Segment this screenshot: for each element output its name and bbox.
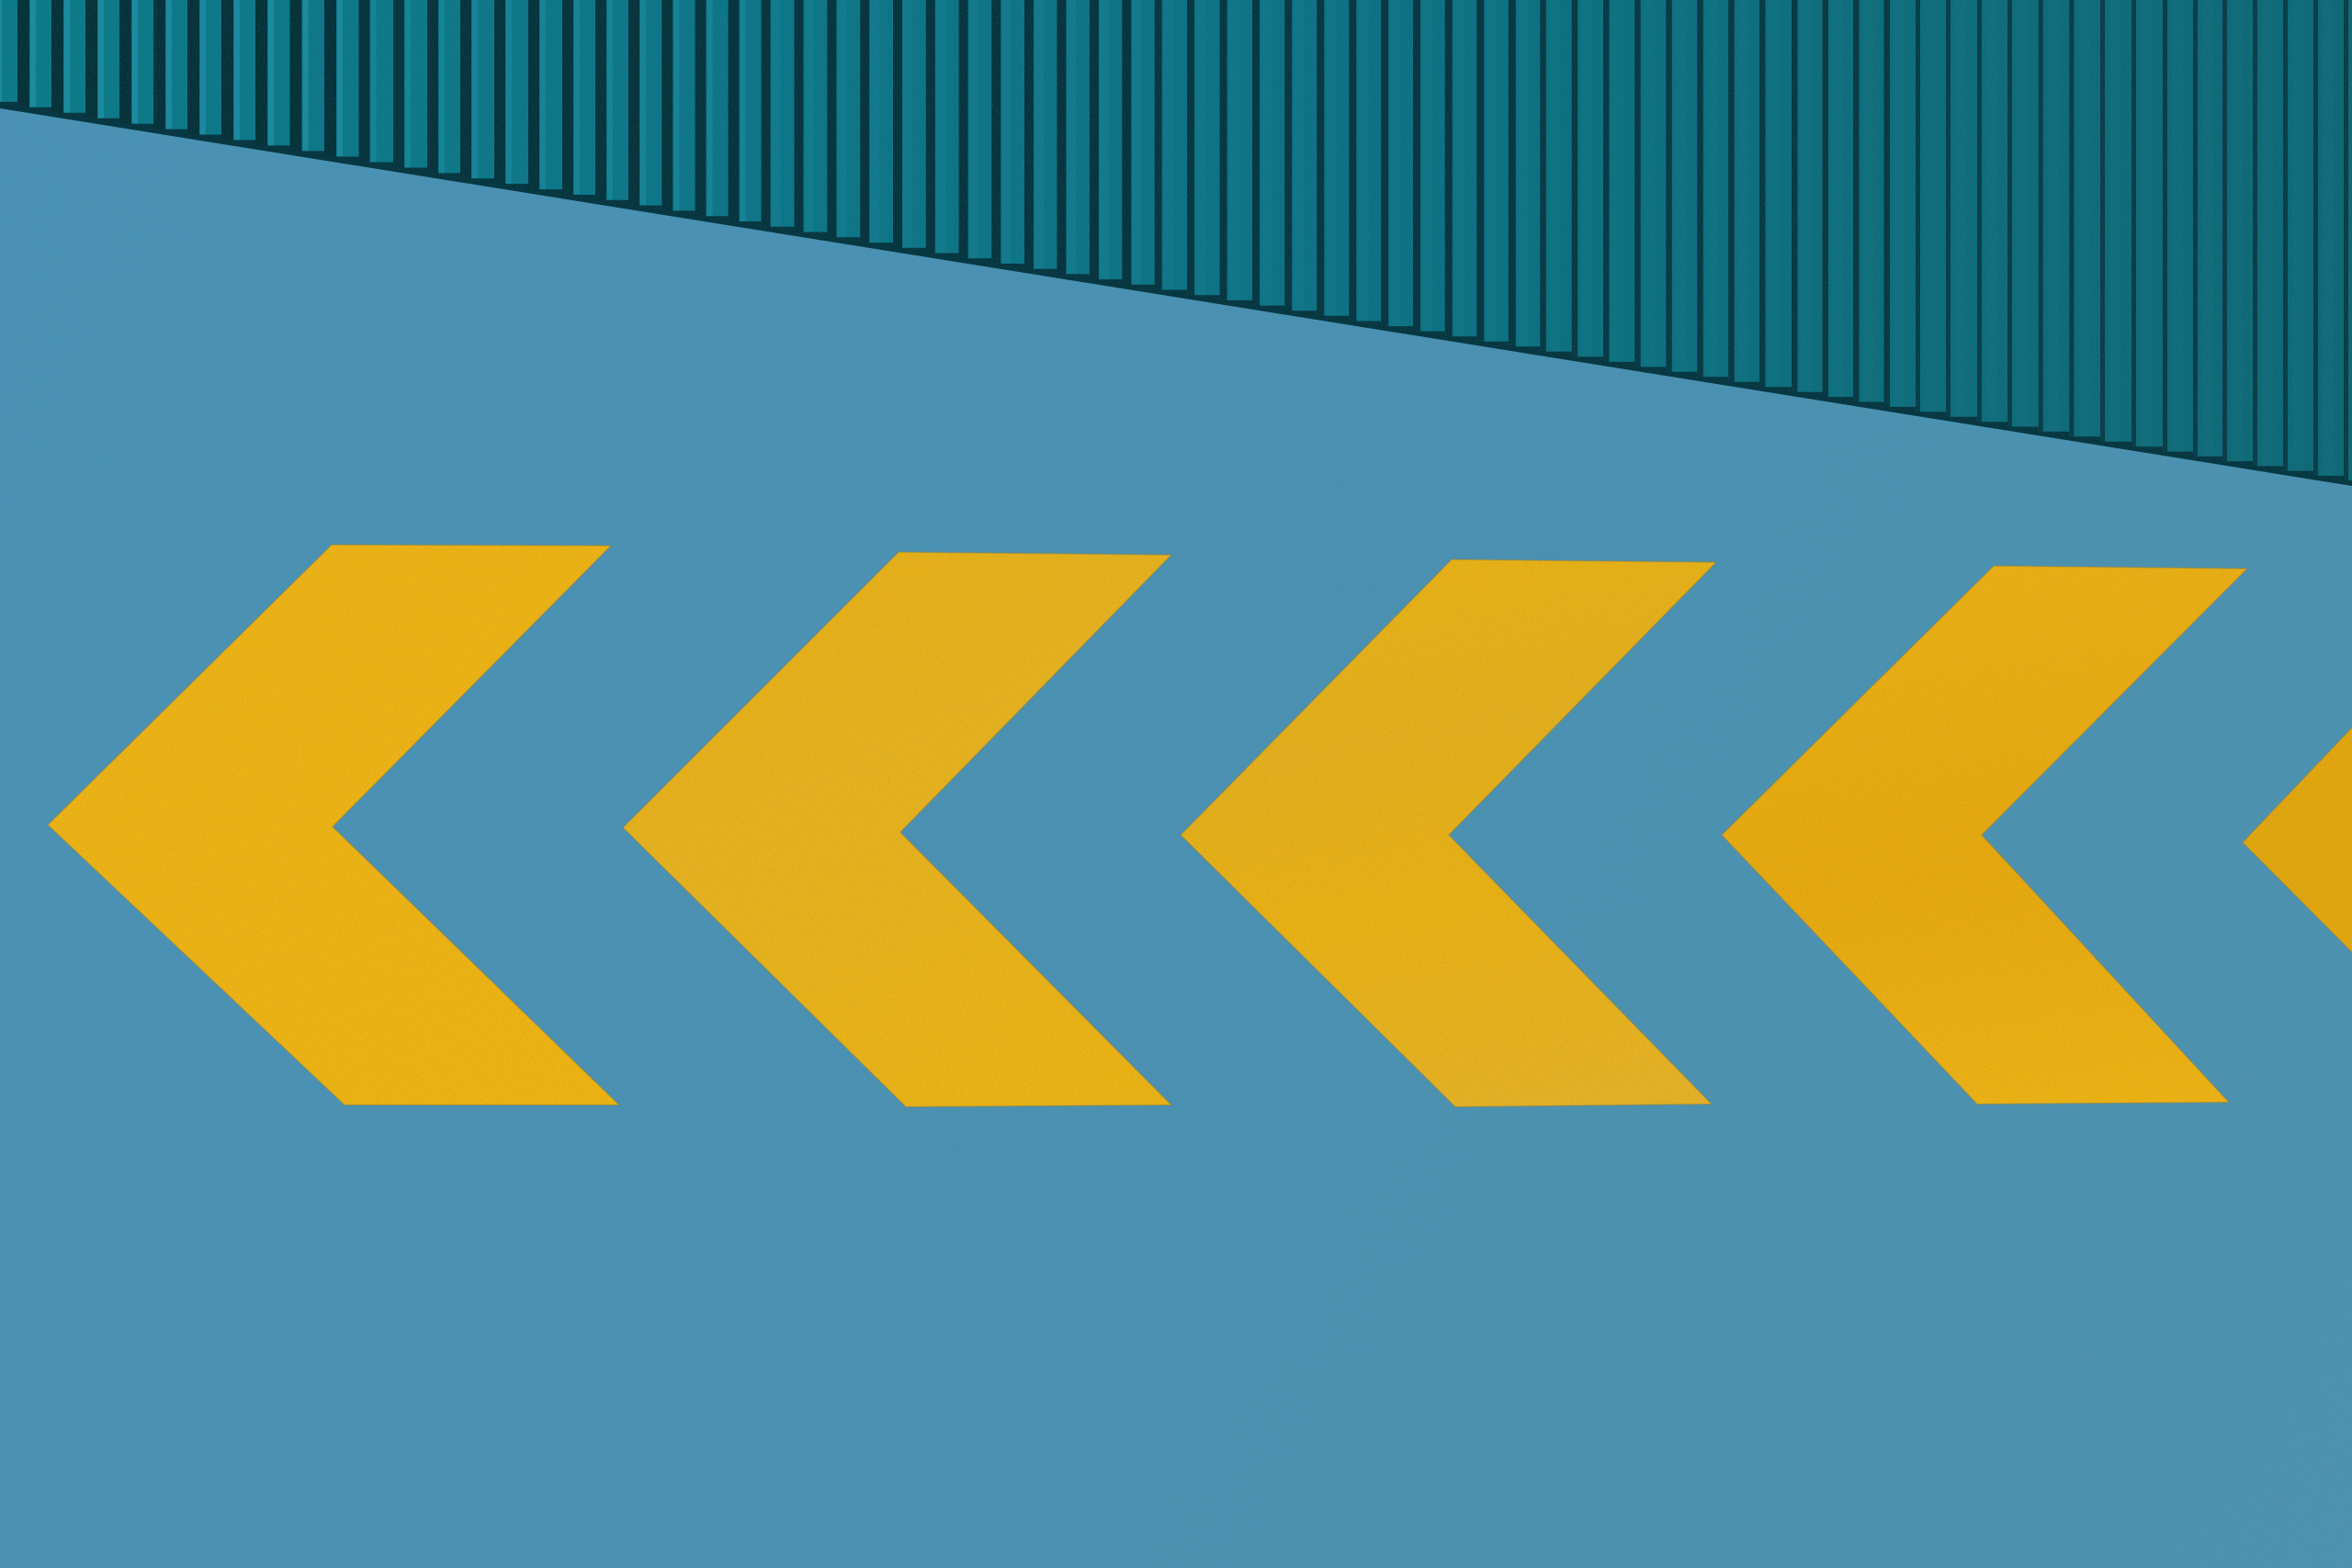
panel: ribbed teal cladding xyxy=(0,0,2352,514)
icon: chevron arrow 3 xyxy=(1181,559,1716,1107)
rib bottom shadow staircase xyxy=(0,102,2352,496)
icon: chevron arrow 5 cropped at right edge xyxy=(2243,689,2352,989)
icon: chevron arrow 2 xyxy=(623,552,1171,1107)
icon: chevron arrow 1 xyxy=(48,545,619,1105)
icon: chevron arrow 4 xyxy=(1722,566,2247,1104)
